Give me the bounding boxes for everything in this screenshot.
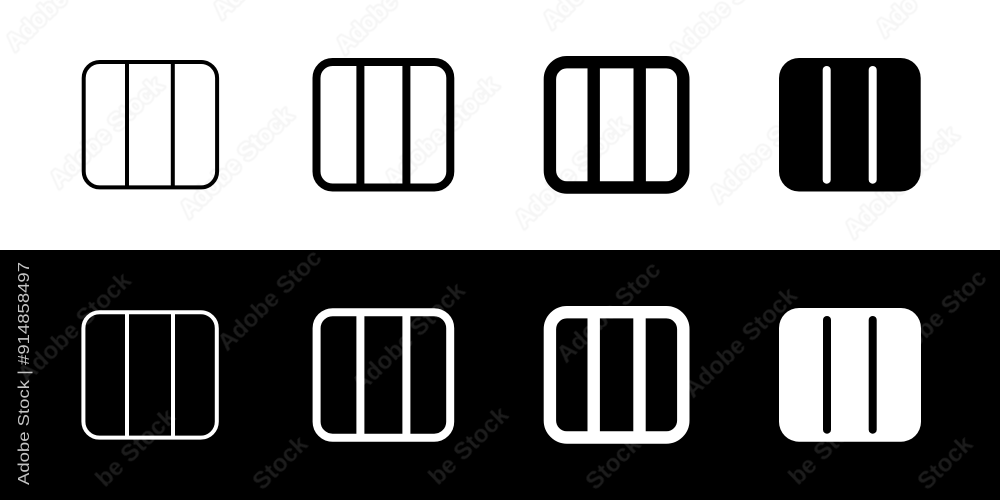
icon: solid three columns, white on black: [779, 308, 921, 442]
watermark pattern: bottom band: Adobe Stoc: [551, 256, 666, 368]
watermark pattern: bottom band: be Stock: [90, 403, 182, 492]
watermark pattern: top band: Adobe Stock: [44, 72, 169, 193]
icon: solid three columns, black on white: [779, 58, 921, 192]
watermark pattern: bottom band: Adobe Stock: [678, 282, 803, 403]
watermark pattern: top band: Adobe Stock: [839, 122, 964, 243]
panel: black bottom band: [0, 250, 1000, 500]
watermark pattern: top band: [0, 0, 964, 243]
icon: bold outline three columns, black on white: [550, 62, 683, 188]
icon: thin outline three columns, black on white: [84, 62, 217, 187]
watermark pattern: bottom band: Adobe Stoc: [212, 244, 327, 356]
icon: bold outline three columns, white on black: [550, 312, 683, 438]
watermark pattern: bottom band: Stock: [247, 430, 314, 495]
watermark pattern: bottom band: Adobe Stock: [12, 267, 137, 388]
watermark pattern: top band: Adobe Stock: [704, 87, 829, 208]
watermark pattern: bottom band: Adobe Stock: [346, 277, 471, 398]
icon: medium outline three columns, black on white: [316, 62, 450, 188]
watermark pattern: bottom band: [12, 244, 992, 495]
side label: stock id: Adobe Stock | #914858497: [16, 262, 33, 485]
watermark pattern: bottom band: Stock: [580, 430, 647, 495]
watermark pattern: top band: Adobe Stock: [379, 72, 504, 193]
watermark pattern: top band: Adobe Stock: [174, 102, 299, 223]
icon: medium outline three columns, white on black: [317, 312, 450, 438]
panel: white top band: [0, 0, 1000, 250]
watermark pattern: bottom band: be Stock: [423, 401, 515, 490]
watermark pattern: bottom band: be Stock: [783, 401, 875, 490]
watermark pattern: top band: Adobe Stock: [509, 112, 634, 233]
icon: thin outline three columns, white on black: [83, 312, 217, 438]
watermark pattern: bottom band: Adobe Stoc: [877, 264, 992, 376]
watermark pattern: bottom band: Stock: [912, 430, 979, 495]
